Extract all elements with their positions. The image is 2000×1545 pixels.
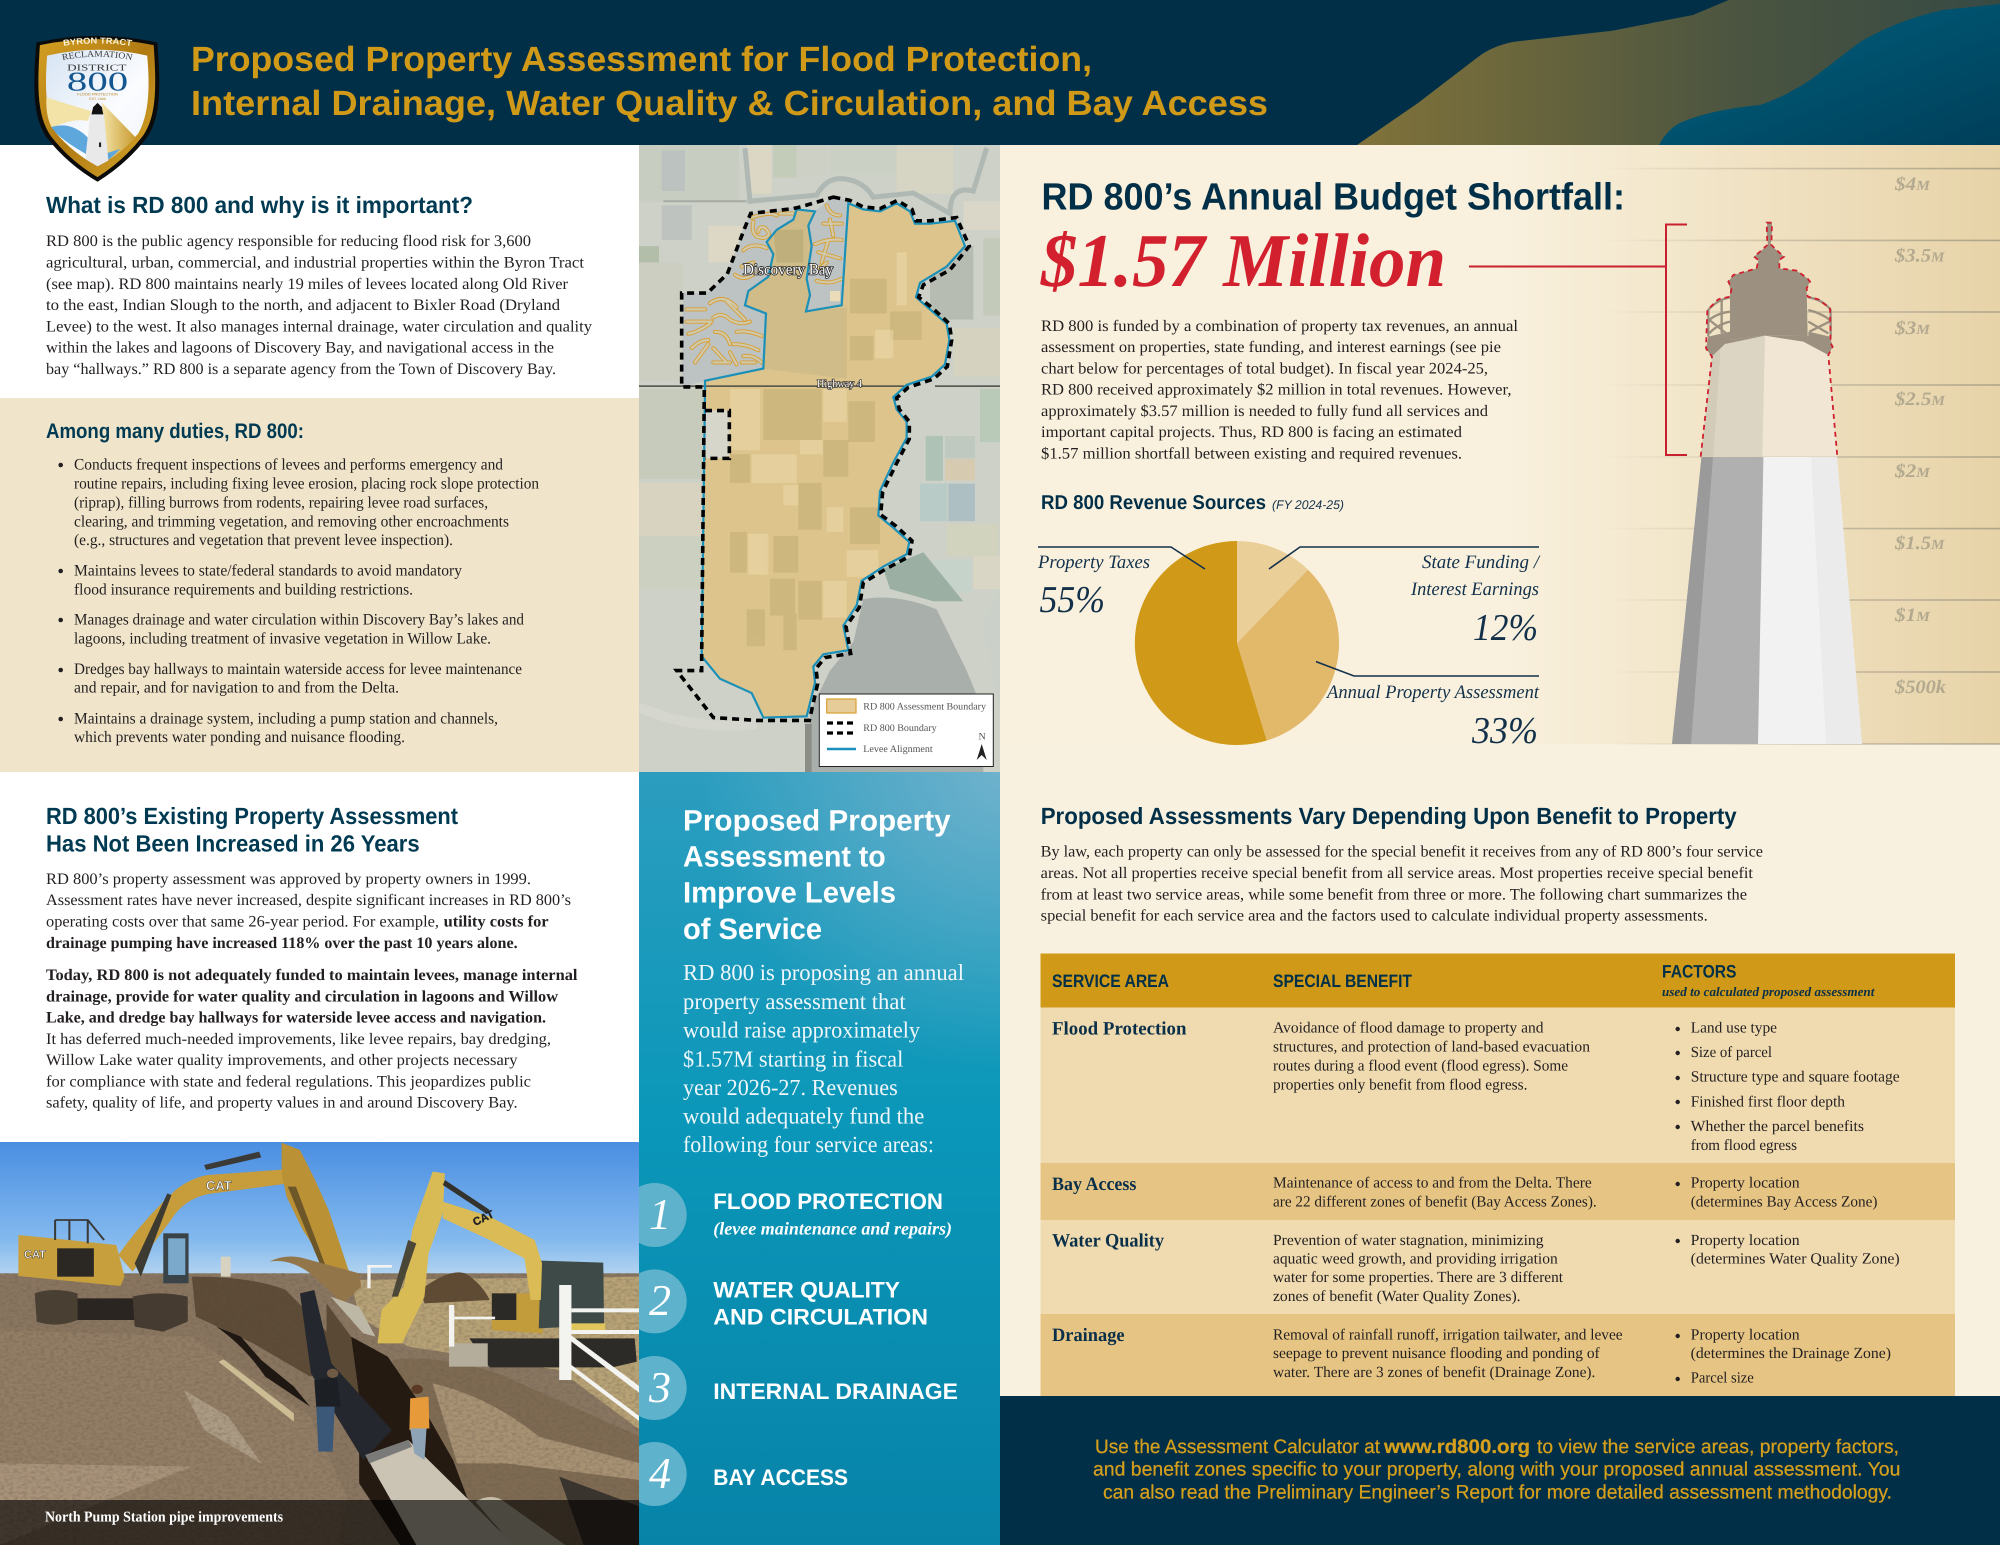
table header: FACTORS	[1662, 961, 1736, 981]
title: Proposed Property Assessment for Flood Protection,	[191, 40, 1092, 79]
heading: proposed assessment: Improve Levels	[683, 876, 896, 910]
row: bay access: are 22 different zones of benefit (Bay Access Zones).	[1273, 1194, 1597, 1211]
trench	[351, 1336, 500, 1545]
dollar scale labels: $3M	[1894, 318, 1931, 339]
row: flood protection: Land use type	[1691, 1020, 1777, 1037]
row: water quality: Water Quality	[1052, 1231, 1164, 1252]
text block: what is RD 800	[46, 233, 592, 378]
pie chart: revenue sources	[1135, 541, 1339, 745]
panel: budget shortfall	[1000, 145, 2000, 752]
bullet list: duties	[58, 456, 539, 746]
text block: proposed assessment: would adequately fund the	[683, 1103, 924, 1128]
map legend	[819, 694, 993, 766]
heading: existing assessment: Has Not Been Increased in 26 Years	[46, 831, 420, 857]
row: water quality: (determines Water Quality Zone)	[1691, 1250, 1900, 1267]
text block: proposed assessment	[683, 960, 964, 1157]
heading: among many duties: Among many duties, RD 800:	[46, 420, 304, 443]
bullet list: duties: routine repairs, including fixing levee erosion, placing rock slope protection	[74, 475, 539, 492]
shortfall amount: $1.57 Million	[1040, 219, 1446, 303]
heading: what is RD 800: What is RD 800 and why is it important?	[46, 192, 473, 218]
bullet list: duties: Maintains a drainage system, including a pump station and channels,	[74, 710, 498, 727]
row: water quality: zones of benefit (Water Quality Zones).	[1273, 1288, 1521, 1305]
heading: existing assessment	[46, 803, 458, 857]
CAT logos: CAT	[471, 1209, 496, 1229]
dollar scale gridlines	[1600, 169, 2000, 744]
map legend: N	[978, 732, 986, 742]
row: bay access: Maintenance of access to and from the Delta. There	[1273, 1175, 1592, 1192]
service area 2: water quality and circulation: AND CIRCULATION	[713, 1305, 928, 1330]
row: flood protection: Flood Protection	[1052, 1018, 1187, 1040]
text block: budget: RD 800 is funded by a combination of property tax revenues, an annual	[1041, 318, 1519, 335]
footer callout: assessment calculator: www.rd800.org	[1383, 1436, 1530, 1458]
row: flood protection: routes during a flood event (flood egress). Some	[1273, 1057, 1568, 1074]
label: Discovery Bay: Discovery Bay	[743, 262, 833, 279]
heading: proposed assessment: Assessment to	[683, 840, 886, 873]
row: flood protection: Finished first floor depth	[1691, 1093, 1845, 1110]
row: bay access	[1040, 1163, 1955, 1220]
dollar scale labels: $2M	[1894, 461, 1931, 482]
row: water quality: water for some properties. There are 3 different	[1273, 1269, 1564, 1286]
heading: proposed assessment	[683, 804, 951, 946]
text block: what is RD 800: bay “hallways.” RD 800 is a separate agency from the Town of Discovery Bay.	[46, 361, 556, 378]
text block: proposed assessment: RD 800 is proposing an annual	[683, 960, 964, 985]
bullet list: duties: lagoons, including treatment of invasive vegetation in Willow Lake.	[74, 630, 491, 647]
row: flood protection: Whether the parcel benefits	[1691, 1118, 1864, 1135]
tan fields	[730, 279, 922, 650]
service area 1: flood protection: (levee maintenance and repairs)	[713, 1219, 952, 1239]
row: drainage: Removal of rainfall runoff, irrigation tailwater, and levee	[1273, 1327, 1623, 1344]
footer callout: assessment calculator: and benefit zones specific to your property, along with your proposed annual assessment. You	[1093, 1458, 1900, 1480]
text block: existing assessment: operating costs over that same 26-year period. For example,	[46, 914, 439, 931]
header banner	[0, 0, 2000, 145]
text block: what is RD 800: agricultural, urban, commercial, and industrial properties within the Byron Tract	[46, 255, 585, 272]
service area 2: water quality and circulation: WATER QUALITY	[713, 1277, 900, 1302]
service area 2: water quality and circulation: 2	[649, 1276, 671, 1325]
dollar scale labels: $500k	[1894, 677, 1947, 698]
bullet list: duties: Conducts frequent inspections of levees and performs emergency and	[74, 456, 503, 473]
callout: annual property assessment	[1316, 662, 1540, 752]
shortfall bracket and leader	[1469, 224, 1687, 455]
excluded parcel	[705, 411, 729, 458]
text block: what is RD 800: (see map). RD 800 maintains nearly 19 miles of levees located along Old River	[46, 276, 569, 293]
text block: existing assessment: Lake, and dredge bay hallways for waterside levee access and navigation.	[46, 1010, 546, 1027]
footer callout: assessment calculator	[1000, 1396, 2000, 1545]
icon: RD 800 shield logo: BYRON TRACT	[63, 38, 132, 46]
dollar scale labels	[1894, 174, 1947, 698]
callout: state funding: 12%	[1473, 607, 1538, 649]
bullet list: duties: Manages drainage and water circulation within Discovery Bay’s lakes and	[74, 612, 524, 629]
text block: existing assessment: drainage, provide for water quality and circulation in lagoons and Willow	[46, 989, 558, 1006]
heading: proposed assessment: of Service	[683, 913, 822, 946]
excavator right	[378, 1172, 637, 1367]
text block: assessments vary: areas. Not all properties receive special benefit from all service areas. Most properties receive special benefit	[1041, 865, 1754, 882]
bullet list: duties: (e.g., structures and vegetation that prevent levee inspection).	[74, 532, 453, 549]
row: drainage: Property location	[1691, 1327, 1800, 1344]
callout: state funding	[1269, 547, 1541, 649]
text block: existing assessment: safety, quality of life, and property values in and around Discovery Bay.	[46, 1095, 518, 1112]
bullet list: duties: (riprap), filling burrows from rodents, repairing levee road surfaces,	[74, 494, 488, 511]
text block: budget: important capital projects. Thus, RD 800 is facing an estimated	[1041, 424, 1462, 441]
row: drainage: Drainage	[1052, 1325, 1125, 1346]
panel: what is RD 800	[0, 145, 639, 398]
row: flood protection: properties only benefit from flood egress.	[1273, 1076, 1527, 1093]
caption band	[0, 1500, 639, 1545]
text block: assessments vary: By law, each property can only be assessed for the special benefit it receives from any of RD 800’s four service	[1041, 844, 1763, 861]
callout: annual property assessment: Annual Property Assessment	[1325, 682, 1540, 703]
footer callout: assessment calculator: to view the service areas, property factors,	[1537, 1436, 1899, 1458]
ground texture	[0, 1273, 640, 1545]
table: service areas, benefits and factors	[1040, 954, 1955, 1396]
Discovery Bay lagoons	[682, 199, 848, 387]
table header: SERVICE AREA	[1052, 971, 1169, 991]
text block: existing assessment: RD 800’s property assessment was approved by property owners in 1999.	[46, 871, 531, 888]
heading: revenue sources: (FY 2024-25)	[1272, 498, 1344, 512]
row: water quality	[1040, 1220, 1955, 1314]
text block: existing assessment: Willow Lake water quality improvements, and other projects necessary	[46, 1052, 518, 1069]
sky	[0, 1142, 640, 1282]
bullet list: duties: and repair, and for navigation to and from the Delta.	[74, 680, 399, 697]
row: flood protection: structures, and protection of land-based evacuation	[1273, 1038, 1590, 1056]
text block: budget	[1041, 318, 1519, 462]
CAT logos: CAT	[24, 1249, 46, 1261]
icon: RD 800 shield logo: DISTRICT	[67, 63, 127, 72]
dollar scale labels: $1.5M	[1894, 533, 1945, 554]
text block: assessments vary	[1041, 844, 1763, 925]
panel: proposed property assessment (blue)	[623, 772, 1000, 1545]
map: RD 800 boundary	[639, 145, 1000, 773]
row: drainage: seepage to prevent nuisance flooding and ponding of	[1273, 1345, 1601, 1362]
service area 4: bay access: 4	[649, 1449, 671, 1498]
text block: existing assessment: drainage pumping have increased 118% over the past 10 years alone.	[46, 935, 518, 952]
row: drainage: Parcel size	[1691, 1370, 1754, 1386]
map legend: RD 800 Assessment Boundary	[863, 701, 986, 712]
text block: assessments vary: from at least two service areas, while some benefit from three or more. The following chart summarizes the	[1041, 886, 1747, 903]
icon: RD 800 shield logo: FLOOD PROTECTION	[77, 92, 118, 96]
text block: proposed assessment: would raise approximately	[683, 1017, 920, 1042]
text block: existing assessment: Today, RD 800 is not adequately funded to maintain levees, manage internal	[46, 967, 578, 984]
text block: what is RD 800: RD 800 is the public agency responsible for reducing flood risk for 3,600	[46, 233, 531, 250]
dollar scale labels: $4M	[1894, 174, 1931, 195]
panel: among many duties	[0, 398, 639, 772]
icon: RD 800 shield logo: 800	[67, 67, 128, 97]
service area 1: flood protection	[623, 1183, 952, 1247]
text block: proposed assessment: $1.57M starting in fiscal	[683, 1047, 903, 1072]
text block: what is RD 800: to the east, Indian Slough to the north, and adjacent to Bixler Road (Dryland	[46, 297, 560, 314]
text block: existing assessment: It has deferred much-needed improvements, like levee repairs, bay dredging,	[46, 1031, 551, 1048]
icon: RD 800 shield logo: RECLAMATION	[62, 50, 133, 60]
service area 1: flood protection: 1	[649, 1190, 671, 1239]
heading: revenue sources: RD 800 Revenue Sources	[1041, 492, 1266, 514]
text block: existing assessment: utility costs for	[444, 914, 549, 931]
bullet list: duties: which prevents water ponding and nuisance flooding.	[74, 729, 405, 746]
heading: existing assessment: RD 800’s Existing Property Assessment	[46, 803, 458, 829]
levee alignment line	[702, 203, 965, 718]
table header: SPECIAL BENEFIT	[1273, 971, 1412, 991]
panel: existing property assessment	[0, 772, 639, 1142]
excavator left	[18, 1143, 376, 1337]
text block: proposed assessment: year 2026-27. Revenues	[683, 1075, 898, 1100]
map legend: RD 800 Boundary	[863, 723, 937, 734]
assessment area fill	[702, 203, 965, 718]
dollar scale labels: $2.5M	[1894, 389, 1946, 410]
RD 800 boundary dashes	[677, 197, 969, 720]
lighthouse illustration	[1672, 223, 1862, 744]
row: water quality: aquatic weed growth, and providing irrigation	[1273, 1250, 1558, 1267]
row: drainage: (determines the Drainage Zone)	[1691, 1345, 1891, 1362]
fence	[367, 1265, 640, 1422]
workers in trench	[314, 1369, 429, 1460]
row: flood protection: Size of parcel	[1691, 1044, 1772, 1061]
callout: property taxes: Property Taxes	[1037, 552, 1150, 573]
callout: state funding: State Funding /	[1422, 552, 1541, 573]
text block: what is RD 800: Levee) to the west. It also manages internal drainage, water circulation and quality	[46, 318, 592, 335]
highway 4 line	[639, 385, 1000, 387]
service area 4: bay access	[623, 1442, 848, 1506]
heading: budget shortfall: RD 800’s Annual Budget Shortfall:	[1042, 176, 1625, 218]
text block: budget: RD 800 received approximately $2 million in total revenues. However,	[1041, 382, 1512, 399]
service area 4: bay access: BAY ACCESS	[713, 1465, 848, 1490]
heading: proposed assessment: Proposed Property	[683, 804, 951, 837]
heading: assessments vary: Proposed Assessments Vary Depending Upon Benefit to Property	[1041, 803, 1737, 829]
text block: proposed assessment: following four service areas:	[683, 1132, 934, 1157]
CAT logos: CAT	[206, 1178, 232, 1193]
bullet list: duties: Dredges bay hallways to maintain waterside access for levee maintenance	[74, 661, 522, 678]
bullet list: duties: Maintains levees to state/federal standards to avoid mandatory	[74, 562, 462, 579]
worker on mound	[221, 1257, 231, 1277]
table header	[1040, 954, 1955, 1008]
service area 3: internal drainage	[623, 1356, 958, 1420]
section: assessments vary	[1041, 803, 1763, 925]
row: flood protection: from flood egress	[1691, 1137, 1797, 1154]
callout: state funding: Interest Earnings	[1410, 579, 1539, 600]
text block: existing assessment: for compliance with state and federal regulations. This jeopardizes public	[46, 1074, 531, 1091]
text block: proposed assessment: property assessment that	[683, 989, 906, 1014]
dollar scale labels: $3.5M	[1894, 246, 1945, 267]
text block: budget: assessment on properties, state funding, and interest earnings (see pie	[1041, 339, 1501, 356]
text block: budget: $1.57 million shortfall between existing and required revenues.	[1041, 445, 1462, 462]
title	[191, 40, 1268, 123]
label: Highway 4: Highway 4	[817, 378, 862, 390]
row: bay access: Property location	[1691, 1175, 1800, 1192]
text block: existing assessment	[46, 871, 578, 1112]
text block: existing assessment: Assessment rates have never increased, despite significant increases in RD 800’s	[46, 892, 571, 909]
footer callout: assessment calculator: can also read the Preliminary Engineer’s Report for more detailed assessment methodology.	[1103, 1481, 1892, 1503]
timber	[218, 1359, 294, 1422]
page background: right column cream	[1000, 145, 2000, 1396]
row: bay access: Bay Access	[1052, 1174, 1136, 1195]
black pipe	[300, 1290, 392, 1460]
dollar scale labels: $1M	[1894, 605, 1931, 626]
photo: North Pump Station pipe improvements	[0, 1142, 640, 1545]
row: flood protection: Avoidance of flood damage to property and	[1273, 1020, 1544, 1037]
row: drainage: water. There are 3 zones of benefit (Drainage Zone).	[1273, 1364, 1595, 1381]
footer callout: assessment calculator: Use the Assessment Calculator at	[1095, 1436, 1381, 1458]
CAT logos	[24, 1178, 496, 1261]
callout: property taxes: 55%	[1040, 579, 1105, 621]
row: flood protection: Structure type and square footage	[1691, 1069, 1900, 1086]
callout: property taxes	[1037, 547, 1205, 621]
aerial backdrop	[639, 145, 1000, 773]
text block: what is RD 800: within the lakes and lagoons of Discovery Bay, and navigational access in the	[46, 340, 554, 357]
bullet list: duties: clearing, and trimming vegetation, and removing other encroachments	[74, 513, 509, 530]
caption band: North Pump Station pipe improvements	[45, 1510, 283, 1526]
service area 3: internal drainage: INTERNAL DRAINAGE	[713, 1379, 958, 1404]
row: flood protection	[1040, 1008, 1955, 1163]
text block: assessments vary: special benefit for each service area and the factors used to calculate individual property assessments.	[1041, 908, 1708, 925]
service area 3: internal drainage: 3	[648, 1363, 671, 1412]
icon: RD 800 shield logo: EST. 1909	[89, 97, 106, 101]
title: Internal Drainage, Water Quality & Circulation, and Bay Access	[191, 84, 1268, 123]
white pipe	[365, 1440, 514, 1545]
text block: budget: approximately $3.57 million is needed to fully fund all services and	[1041, 403, 1488, 420]
row: bay access: (determines Bay Access Zone)	[1691, 1194, 1878, 1211]
callout: annual property assessment: 33%	[1471, 710, 1538, 752]
bullet list: duties: flood insurance requirements and building restrictions.	[74, 581, 413, 598]
table header: used to calculated proposed assessment	[1662, 984, 1875, 999]
service area 2: water quality and circulation	[623, 1269, 928, 1333]
row: drainage	[1040, 1314, 1955, 1396]
ground	[0, 1273, 640, 1545]
service area 1: flood protection: FLOOD PROTECTION	[713, 1189, 943, 1214]
row: water quality: Prevention of water stagnation, minimizing	[1273, 1232, 1544, 1249]
text block: budget: chart below for percentages of total budget). In fiscal year 2024-25,	[1041, 360, 1488, 378]
row: water quality: Property location	[1691, 1232, 1800, 1249]
icon: RD 800 shield logo	[34, 36, 160, 182]
map legend: Levee Alignment	[863, 744, 933, 755]
